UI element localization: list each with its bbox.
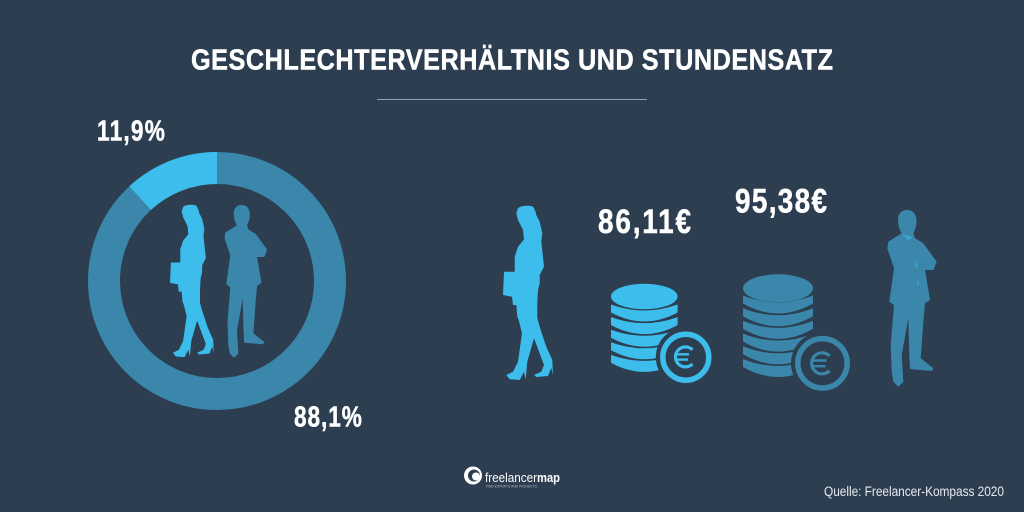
icon: man <box>887 210 937 387</box>
icon: woman <box>503 206 553 380</box>
logo: freelancermap: FIND EXPERTS AND PROJECTS <box>486 484 538 488</box>
logo: freelancermap <box>464 466 560 488</box>
icon: coin stack men <box>743 274 854 395</box>
icon: coin stack women <box>611 284 716 387</box>
logo: freelancermap: freelancer <box>485 470 538 485</box>
logo: freelancermap: map <box>537 470 560 485</box>
label: 86,11€: 86,11€ <box>598 202 691 241</box>
label: 88,1%: 88,1% <box>294 400 362 433</box>
icon: man in donut <box>225 205 267 358</box>
title: GESCHLECHTERVERHÄLTNIS UND STUNDENSATZ <box>191 43 833 76</box>
label: 95,38€: 95,38€ <box>735 182 827 220</box>
donut chart: gender ratio <box>104 168 330 394</box>
icon: woman in donut <box>170 205 214 357</box>
label: 11,9%: 11,9% <box>97 114 165 147</box>
source note: Quelle: Freelancer-Kompass 2020 <box>824 483 1004 499</box>
